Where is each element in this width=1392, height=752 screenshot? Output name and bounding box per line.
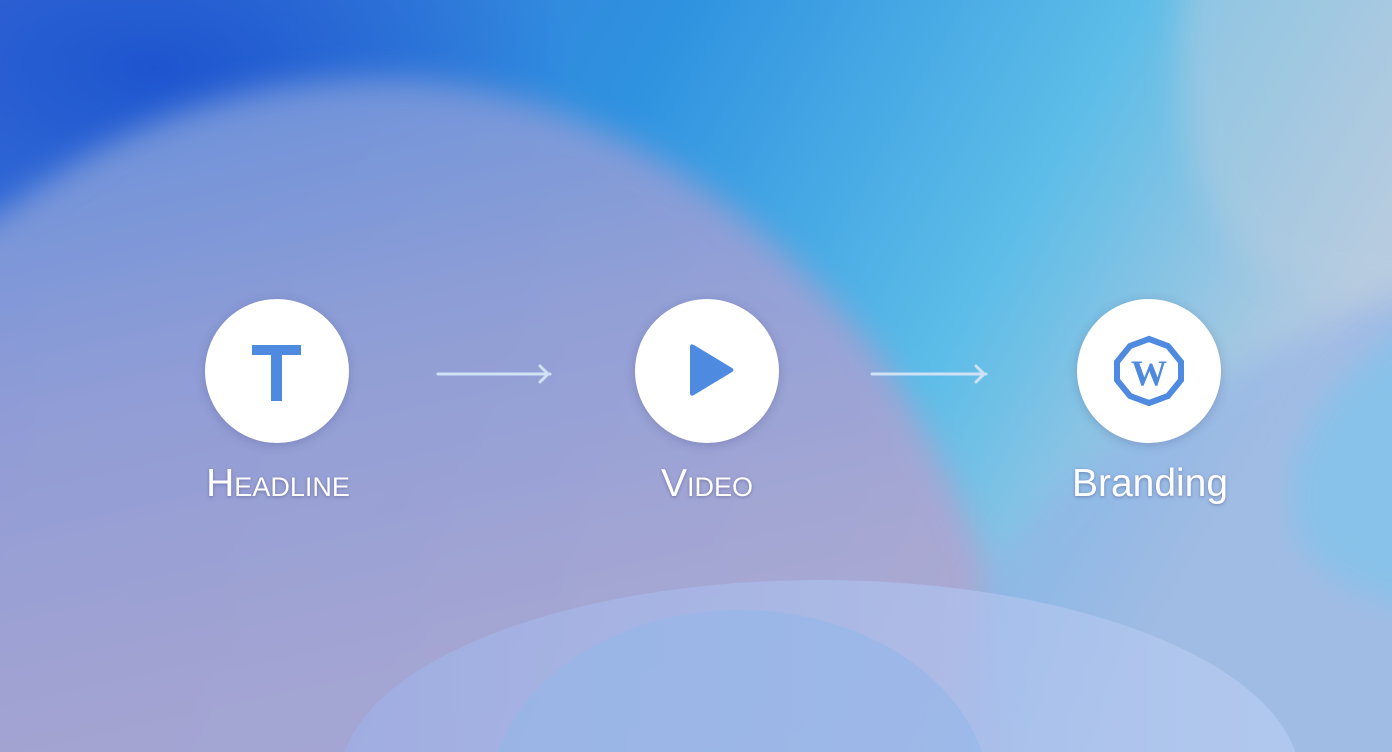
step 3: branding icon <box>1077 299 1221 443</box>
label: headline: Headline <box>206 462 350 505</box>
icon: branding badge: W <box>1131 353 1167 393</box>
label: branding: Branding <box>1072 462 1228 505</box>
icon: play <box>690 344 734 396</box>
arrow 1 <box>436 364 552 384</box>
icon: T letter <box>252 345 301 401</box>
step 1: headline icon <box>205 299 349 443</box>
arrow 2 <box>870 364 988 384</box>
step 2: video icon <box>635 299 779 443</box>
icon: branding badge <box>1114 336 1184 406</box>
label: video: Video <box>661 462 753 505</box>
